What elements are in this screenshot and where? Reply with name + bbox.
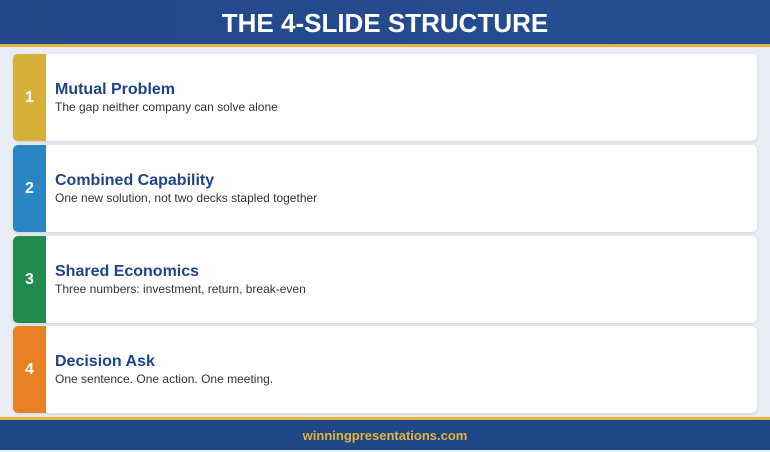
card 4: 4 [25, 360, 34, 378]
card 3: Shared Economics [55, 263, 199, 280]
card 1: 1 [25, 88, 34, 106]
footer: winningpresentations.com [303, 428, 467, 443]
card 4: One sentence. One action. One meeting. [55, 372, 273, 386]
card 2 [13, 145, 757, 232]
card 3: Three numbers: investment, return, break-even [55, 282, 306, 296]
card 1 [13, 54, 757, 141]
card 2: Combined Capability [55, 172, 214, 189]
card 1: Mutual Problem [55, 81, 175, 98]
card 4: Decision Ask [55, 353, 155, 370]
card 4 [13, 326, 757, 413]
card 2: One new solution, not two decks stapled together [55, 191, 317, 205]
footer [0, 417, 770, 450]
card 1: The gap neither company can solve alone [55, 100, 278, 114]
card 2: 2 [25, 180, 34, 196]
card 3: 3 [25, 270, 34, 288]
header: THE 4-SLIDE STRUCTURE [222, 8, 548, 38]
card 3 [13, 236, 757, 323]
header [0, 0, 770, 47]
